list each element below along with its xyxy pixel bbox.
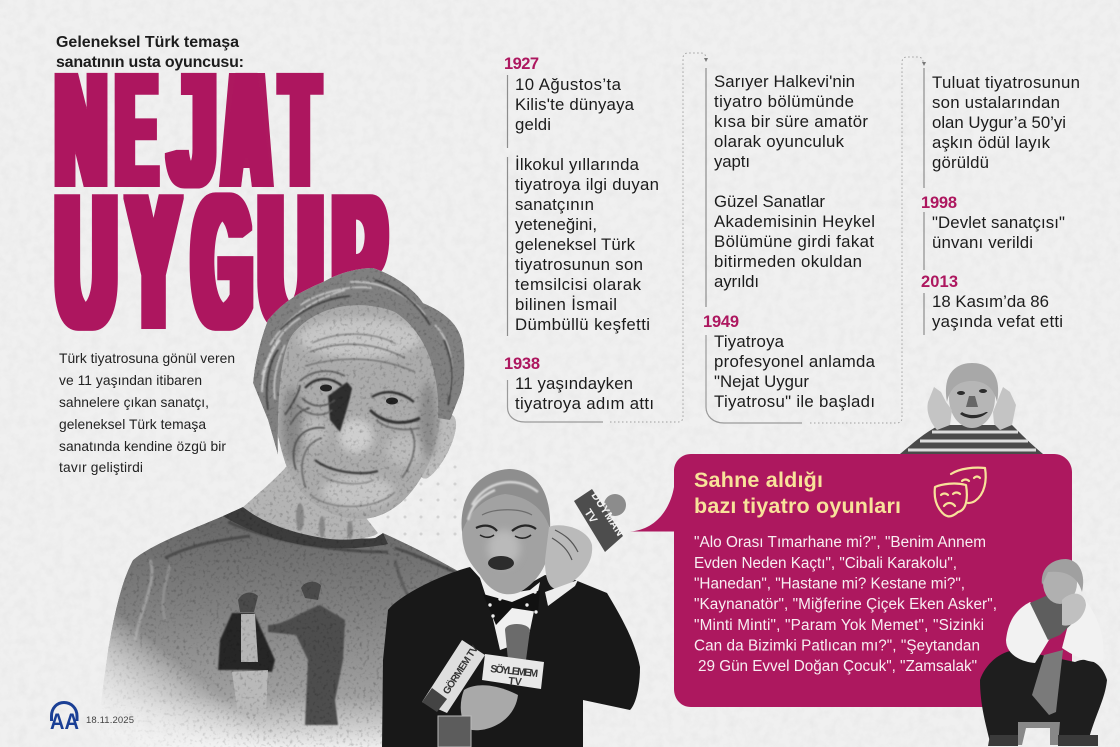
- timeline column two: tiyatro bölümünde: [714, 92, 854, 111]
- panel body text: "Kaynanatör", "Miğferine Çiçek Eken Asker",: [694, 596, 997, 613]
- timeline column three: 18 Kasım’da 86: [932, 292, 1049, 311]
- neck: [243, 462, 378, 540]
- timeline column two: yaptı: [714, 152, 750, 171]
- timeline column three: [921, 73, 1080, 331]
- timeline column one: 11 yaşındayken: [515, 374, 633, 393]
- panel background with speech tail: [630, 454, 1072, 707]
- shoulders and striped shirt: [900, 425, 1043, 454]
- timeline column two: "Nejat Uygur: [714, 372, 809, 391]
- intro paragraph: [59, 351, 235, 475]
- title: name NEJAT: J: [170, 41, 216, 220]
- head: [949, 368, 995, 428]
- face shading: [282, 318, 437, 508]
- title: name UYGUR: U: [259, 156, 322, 368]
- nose shadow: [328, 382, 352, 432]
- panel body text: [694, 534, 997, 675]
- timeline column one: tiyatroya adım attı: [515, 394, 654, 413]
- timeline column one: bilinen İsmail: [515, 295, 617, 314]
- face features: [957, 389, 988, 418]
- microphone: DUYMAN TV: TV: [581, 507, 600, 526]
- timeline column two: Sarıyer Halkevi'nin: [714, 72, 855, 91]
- intro paragraph: ve 11 yaşından itibaren: [59, 373, 202, 388]
- lower hand: [461, 685, 518, 730]
- microphone: GÖRMEM TV: GÖRMEM TV: [440, 642, 481, 697]
- intro paragraph: Türk tiyatrosuna gönül veren: [59, 351, 235, 366]
- timeline column three: aşkın ödül layık: [932, 133, 1051, 152]
- timeline column two: Tiyatrosu" ile başladı: [714, 392, 875, 411]
- panel heading: bazı tiyatro oyunları: [694, 494, 901, 518]
- photo: Nejat Uygur portrait with shirt: [98, 268, 470, 747]
- panel body text: "Minti Minti", "Param Yok Memet", "Sizinki: [694, 617, 984, 634]
- intro paragraph: geleneksel Türk temaşa: [59, 417, 206, 432]
- timeline connector: column two: [706, 57, 926, 423]
- hand: [1062, 594, 1086, 626]
- shirt shoulder folds: [135, 522, 455, 640]
- timeline column two: olarak oyunculuk: [714, 132, 845, 151]
- title: name UYGUR: Y: [129, 156, 178, 368]
- callout panel: selected plays: [630, 454, 1072, 707]
- photo: Uygur cupping his ears: [900, 363, 1043, 454]
- timeline column one: 10 Ağustos’ta: [515, 75, 622, 94]
- panel heading: [694, 468, 901, 518]
- timeline column one: tiyatrosunun son: [515, 255, 643, 274]
- shirt cuff: [545, 580, 578, 606]
- panel body text: Can da Bizimki Patlıcan mı?", "Şeytandan: [694, 638, 980, 654]
- panel body text: Evden Neden Kaçtı", "Cibali Karakolu",: [694, 555, 957, 572]
- timeline connector: column three: [923, 68, 925, 335]
- timeline column two: Bölümüne girdi fakat: [714, 232, 874, 251]
- timeline column one: İlkokul yıllarında: [515, 155, 640, 174]
- timeline column one: temsilcisi olarak: [515, 275, 642, 294]
- figures printed on shirt: [218, 582, 345, 725]
- clown nose and moustache: [488, 556, 514, 570]
- panel body text: "Alo Orası Tımarhane mi?", "Benim Annem: [694, 534, 986, 551]
- date: 18.11.2025: [86, 715, 134, 726]
- panel heading: Sahne aldığı: [694, 468, 823, 492]
- title: subtitle: Geleneksel Türk temaşa: [56, 34, 239, 51]
- icon: theatre masks: [935, 468, 986, 516]
- timeline column three: "Devlet sanatçısı": [932, 213, 1065, 232]
- timeline column two: [703, 72, 876, 411]
- trousers: [980, 650, 1107, 743]
- timeline column three: Tuluat tiyatrosunun: [932, 73, 1080, 92]
- timeline column one: 1938: [504, 355, 540, 373]
- timeline column three: son ustalarından: [932, 93, 1060, 112]
- water glass: [438, 716, 471, 747]
- timeline column two: profesyonel anlamda: [714, 352, 876, 371]
- suit: [382, 567, 640, 747]
- title: name NEJAT: T: [282, 41, 318, 219]
- microphone: SÖYLEMEM TV: [482, 624, 544, 689]
- timeline column two: kısa bir süre amatör: [714, 112, 868, 131]
- microphone: DUYMAN TV: DUYMAN: [588, 490, 626, 539]
- hands: [927, 387, 952, 430]
- eyes and wrinkles: [285, 334, 420, 506]
- timeline column two: Güzel Sanatlar: [714, 192, 825, 211]
- logo: Anadolu Agency: AA: [50, 709, 79, 734]
- timeline column three: olan Uygur’a 50’yi: [932, 113, 1066, 132]
- hair: [946, 363, 998, 402]
- title: name UYGUR: R: [334, 157, 386, 368]
- timeline column three: 1998: [921, 194, 957, 212]
- timeline column two: 1949: [703, 313, 739, 331]
- timeline column three: 2013: [921, 273, 958, 291]
- stool: [1018, 722, 1060, 745]
- timeline column one: [504, 55, 659, 413]
- head: [1043, 562, 1077, 604]
- title: name UYGUR: [56, 156, 386, 369]
- timeline column two: Akademisinin Heykel: [714, 212, 875, 231]
- vest and tie: [1030, 595, 1085, 640]
- microphone: SÖYLEMEM TV: TV: [508, 675, 522, 688]
- timeline column two: bitirmeden okuldan: [714, 252, 862, 271]
- intro paragraph: sahnelere çıkan sanatçı,: [59, 395, 209, 410]
- microphone: DUYMAN TV: [574, 489, 626, 552]
- title: name NEJAT: N: [56, 41, 106, 220]
- face: [271, 298, 442, 519]
- hair: [1042, 559, 1083, 592]
- timeline column one: 1927: [504, 55, 539, 73]
- photo: Uygur with reporter microphones: [382, 469, 640, 747]
- panel body text: "Hanedan", "Hastane mi? Kestane mi?",: [694, 576, 965, 592]
- timeline column one: geleneksel Türk: [515, 235, 636, 254]
- hair: [462, 469, 550, 532]
- collar: [223, 507, 388, 548]
- sleeves: [1006, 602, 1052, 663]
- intro paragraph: sanatında kendine özgü bir: [59, 439, 226, 454]
- photo: Uygur seated in traditional costume: [980, 559, 1107, 746]
- title: subtitle: [56, 34, 244, 71]
- hair: [253, 268, 464, 455]
- timeline column one: tiyatroya ilgi duyan: [515, 175, 659, 194]
- ear: [419, 414, 456, 479]
- timeline column one: sanatçının: [515, 195, 594, 214]
- microphone: GÖRMEM TV: [422, 640, 485, 713]
- title: name NEJAT: E: [117, 40, 156, 219]
- bow tie: [483, 590, 540, 625]
- eyes: [476, 510, 536, 538]
- timeline column three: yaşında vefat etti: [932, 312, 1063, 331]
- panel body text: 29 Gün Evvel Doğan Çocuk", "Zamsalak": [698, 658, 977, 675]
- timeline column one: geldi: [515, 115, 551, 134]
- title: name NEJAT: [56, 40, 318, 220]
- shirt front: [478, 572, 540, 650]
- head: [462, 490, 550, 594]
- timeline column two: ayrıldı: [714, 272, 759, 291]
- timeline connector: column one: [508, 53, 708, 422]
- timeline column one: Dümbüllü keşfetti: [515, 315, 650, 334]
- timeline column one: Kilis'te dünyaya: [515, 95, 635, 114]
- title: name UYGUR: G: [194, 156, 251, 368]
- boots: [988, 735, 1098, 746]
- microphone: SÖYLEMEM TV: SÖYLEMEM: [490, 662, 539, 680]
- timeline column three: görüldü: [932, 153, 989, 172]
- shirt: [98, 507, 470, 747]
- raised hand: [545, 525, 592, 590]
- timeline column one: yeteneğini,: [515, 215, 597, 234]
- timeline column three: ünvanı verildi: [932, 233, 1033, 252]
- title: name NEJAT: A: [225, 41, 268, 219]
- title: subtitle: sanatının usta oyuncusu:: [56, 54, 244, 71]
- halftone dots: [386, 466, 456, 536]
- timeline column two: Tiyatroya: [714, 332, 785, 351]
- title: name UYGUR: U: [56, 156, 116, 369]
- intro paragraph: tavır geliştirdi: [59, 460, 143, 475]
